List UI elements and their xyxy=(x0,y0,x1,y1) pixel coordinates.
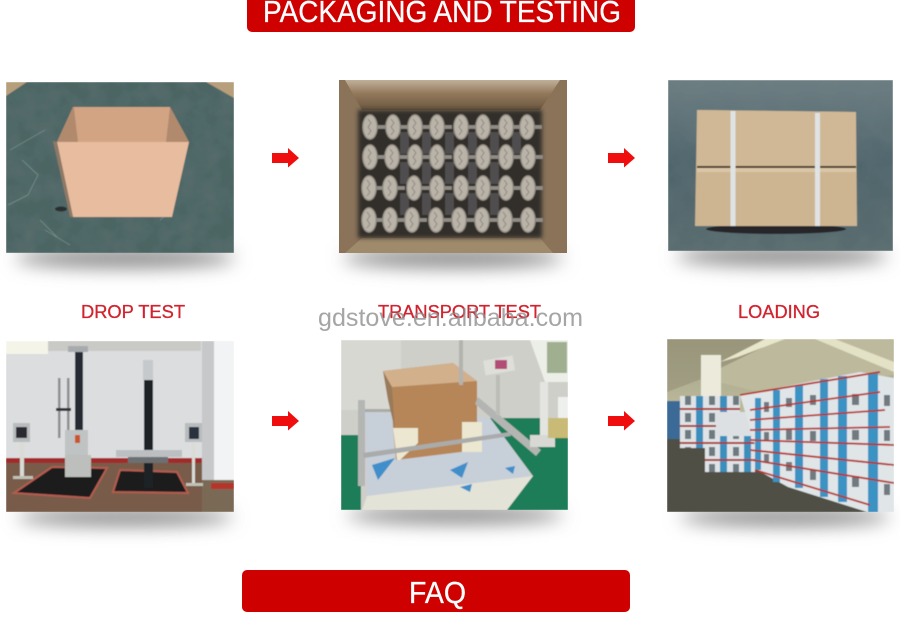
photo: transport vibration test xyxy=(341,340,568,524)
arrow: step 2 to 3 xyxy=(608,148,635,168)
watermark: gdstove.en.alibaba.com xyxy=(318,304,583,332)
photo: strapped sealed carton xyxy=(668,80,893,266)
arrow: step 1 to 2 xyxy=(272,148,299,168)
bottom banner: faq: FAQ xyxy=(409,575,466,610)
photo: empty carton on concrete floor xyxy=(6,82,235,268)
arrow: step 4 to 5 xyxy=(272,411,299,430)
bottom banner: faq xyxy=(242,570,630,612)
label: drop test: DROP TEST xyxy=(81,302,185,322)
label: transport test: TRANSPORT TEST xyxy=(378,302,541,322)
photo: drop test machines xyxy=(6,341,234,526)
photo: warehouse loading of stacked cartons xyxy=(667,339,894,526)
label: loading: LOADING xyxy=(738,302,820,322)
photo: carton filled with packed stoves xyxy=(339,80,567,268)
arrow: step 5 to 6 xyxy=(608,411,635,430)
